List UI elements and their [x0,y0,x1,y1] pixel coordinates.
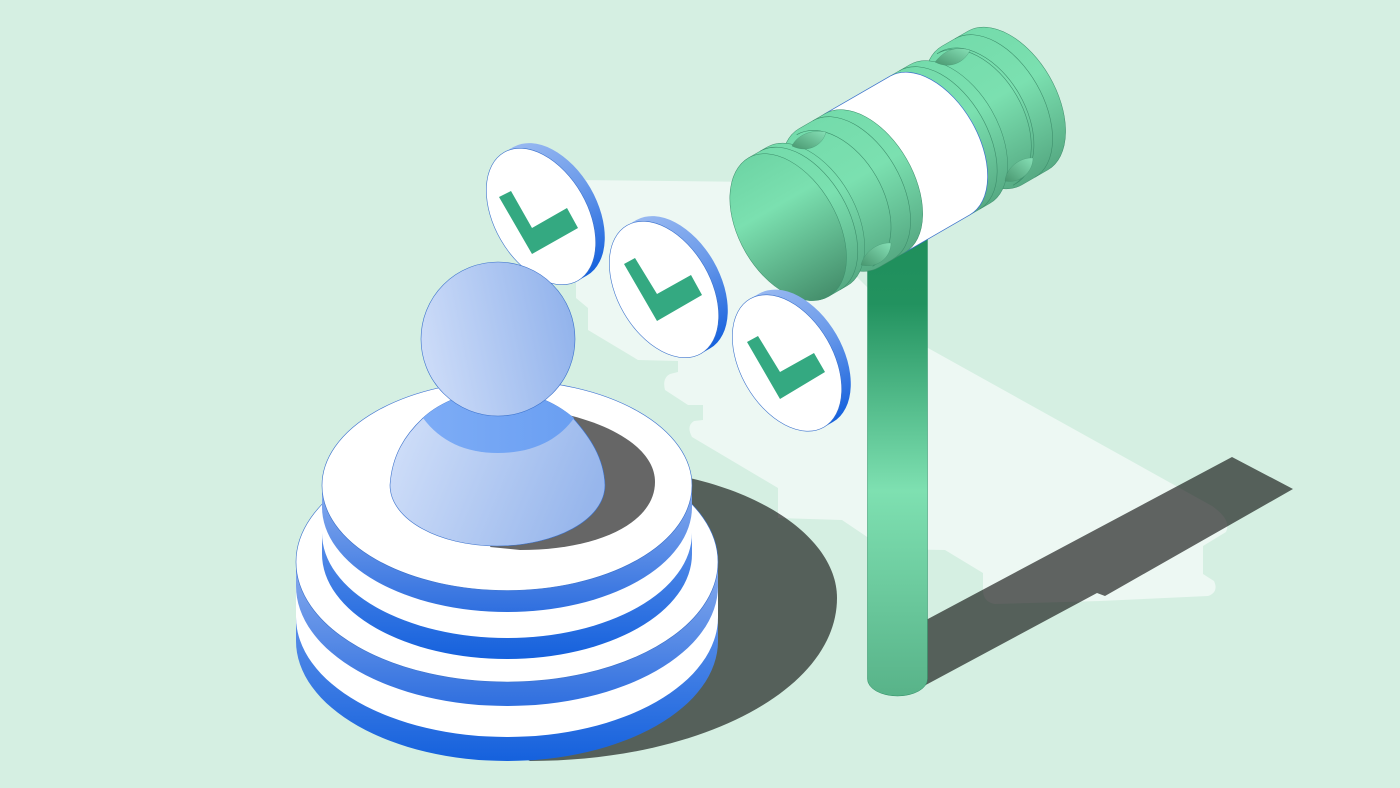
gavel long shadow [922,457,1293,687]
large podium shadow [400,476,837,761]
white band [783,52,1012,276]
upper podium tier [322,380,692,659]
light stencil shape behind gavel [576,180,1227,604]
lower podium tier [296,442,718,761]
pawn shadow on podium [490,413,655,550]
pawn neck shade [423,390,574,453]
front collar [757,90,947,291]
gavel handle [868,230,928,696]
pawn body [390,390,605,546]
back neck [872,32,1055,220]
gavel notches [792,48,1033,266]
gavel head [705,7,1089,321]
ring lines [760,15,1076,290]
check coin 3 [710,270,873,450]
back cap [900,7,1089,209]
dome end [705,134,870,321]
check coin 1 [464,124,627,304]
front flange [707,123,889,320]
check coin 2 [587,197,750,377]
front neck [729,114,912,303]
pawn head [421,262,575,416]
back flange [848,41,1031,239]
